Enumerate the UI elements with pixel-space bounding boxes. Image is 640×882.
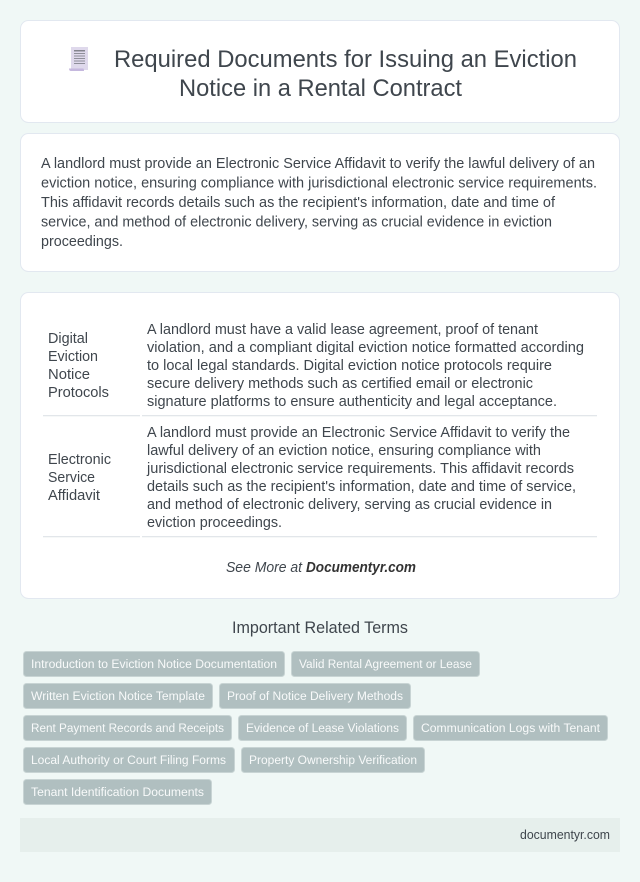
table row: Digital Eviction Notice Protocols: [43, 322, 597, 416]
tag: Introduction to Eviction Notice Documentation: [31, 657, 277, 671]
tag: [24, 684, 212, 708]
tag: [24, 780, 212, 804]
footer bar: [20, 818, 620, 852]
tag: [24, 716, 232, 740]
tag: Proof of Notice Delivery Methods: [227, 689, 403, 703]
title: Notice in a Rental Contract: [179, 75, 462, 102]
table row: Digital Eviction Notice Protocols: to local legal standards. Digital eviction notice protocols require: [147, 358, 552, 374]
icon: document scroll: [69, 47, 88, 71]
table row: Electronic Service Affidavit: and method of electronic delivery, serving as crucial evidence in: [147, 497, 552, 513]
tag: [220, 684, 410, 708]
table row: Digital Eviction Notice Protocols: signature platforms to ensure authenticity and legal acceptance.: [147, 394, 557, 410]
intro text: eviction notice, ensuring compliance with jurisdictional electronic service requirements.: [41, 174, 597, 192]
table row: Electronic Service Affidavit: Electronic: [48, 452, 111, 468]
footer bar: documentyr.com: [520, 828, 610, 842]
title: Required Documents for Issuing an Eviction: [114, 46, 577, 73]
tag: [414, 716, 608, 740]
tag: [292, 652, 480, 676]
table row: Electronic Service Affidavit: Service: [48, 470, 95, 486]
related term tags: [24, 652, 608, 804]
table row: Digital Eviction Notice Protocols: violation, and a compliant digital eviction notice formatted according: [147, 340, 584, 356]
table row: Digital Eviction Notice Protocols: secure delivery methods such as certified email or electronic: [147, 376, 533, 392]
tag: [24, 652, 284, 676]
intro text: This affidavit records details such as the recipient's information, date and time of: [41, 194, 556, 211]
tag: Communication Logs with Tenant: [421, 721, 601, 735]
tag: Written Eviction Notice Template: [31, 689, 205, 703]
tag: [238, 716, 406, 740]
table row: Digital Eviction Notice Protocols: Eviction: [48, 349, 98, 365]
intro text: [41, 155, 597, 250]
see more link: Documentyr.com: [306, 560, 416, 576]
tag: [242, 748, 424, 772]
tag: Tenant Identification Documents: [31, 785, 204, 799]
tag: [24, 748, 234, 772]
see more link: See More at: [226, 560, 303, 576]
tag: Evidence of Lease Violations: [246, 721, 399, 735]
intro text: A landlord must provide an Electronic Service Affidavit to verify the lawful delivery of an: [41, 155, 595, 172]
table row: Electronic Service Affidavit: [43, 425, 597, 537]
tag: Valid Rental Agreement or Lease: [299, 657, 472, 671]
panel: header: [20, 20, 620, 122]
table row: Electronic Service Affidavit: jurisdictional electronic service requirements. This affidavit records: [146, 461, 574, 477]
title: [114, 46, 577, 102]
table row: Electronic Service Affidavit: details such as the recipient's information, date and time of service,: [147, 479, 576, 495]
see more link: [226, 560, 416, 576]
tag: Local Authority or Court Filing Forms: [31, 753, 226, 767]
table row: Digital Eviction Notice Protocols: A landlord must have a valid lease agreement, proof of tenant: [147, 322, 538, 338]
intro text: proceedings.: [41, 233, 123, 250]
table row: Digital Eviction Notice Protocols: Protocols: [48, 385, 109, 401]
table row: Electronic Service Affidavit: lawful delivery of an eviction notice, ensuring compliance with: [147, 443, 541, 459]
intro text: service, and method of electronic delivery, serving as crucial evidence in eviction: [41, 214, 552, 230]
table row: Electronic Service Affidavit: eviction proceedings.: [147, 515, 282, 531]
tag: Rent Payment Records and Receipts: [31, 721, 224, 735]
table row: Electronic Service Affidavit: A landlord must provide an Electronic Service Affidavit to verify the: [147, 425, 570, 441]
heading: important related terms: Important Related Terms: [232, 619, 408, 637]
panel: document table: [20, 292, 620, 598]
panel: introduction: [20, 134, 620, 272]
table row: Electronic Service Affidavit: Affidavit: [48, 488, 100, 504]
table row: Digital Eviction Notice Protocols: Digital: [48, 331, 88, 347]
tag: Property Ownership Verification: [249, 753, 417, 767]
table row: Digital Eviction Notice Protocols: Notice: [48, 367, 90, 383]
